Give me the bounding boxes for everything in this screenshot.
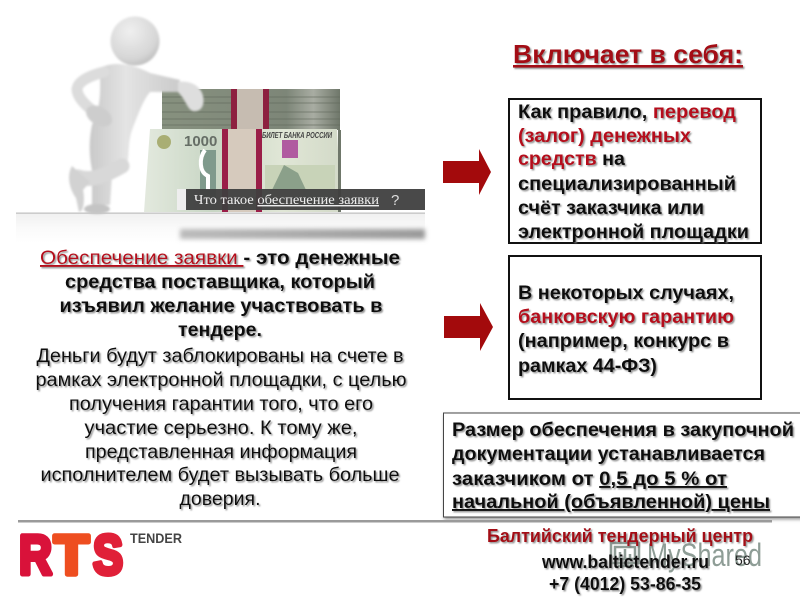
note text: начальной (объявленной) цены bbox=[452, 491, 770, 513]
money stack: БИЛЕТ БАНКА РОССИИ bbox=[262, 131, 332, 140]
footer contacts bbox=[487, 525, 753, 594]
arrow 2 bbox=[444, 303, 493, 351]
definition text block: изъявил желание участвовать в bbox=[60, 296, 382, 317]
panel text: (залог) денежных bbox=[518, 125, 691, 147]
panel text: (например, конкурс в bbox=[518, 330, 729, 352]
panel text bbox=[518, 101, 749, 243]
watermark: MyShared bbox=[611, 537, 762, 573]
definition text block: представленная информация bbox=[85, 442, 357, 463]
panel text: банковскую гарантию bbox=[518, 306, 734, 328]
definition heading: red underlined term: Обеспечение заявки - это денежные bbox=[40, 248, 400, 269]
panel: security size note bbox=[444, 413, 800, 517]
panel text: специализированный bbox=[518, 173, 736, 195]
heading: Включает в себя: Включает в себя: bbox=[513, 39, 743, 69]
panel text: рамках 44-ФЗ) bbox=[518, 355, 657, 377]
panel: money transfer bbox=[509, 99, 761, 243]
definition text block: тендере. bbox=[178, 320, 262, 341]
definition text block: доверия. bbox=[180, 489, 260, 510]
footer contacts: www.baltictender.ru bbox=[541, 551, 709, 572]
caption band bbox=[186, 189, 425, 210]
money stack: 1000 bbox=[184, 133, 217, 150]
definition text block: рамках электронной площадки, с целью bbox=[36, 370, 406, 391]
logo: RTS Tender bbox=[19, 523, 182, 586]
panel text: средств на bbox=[518, 148, 625, 170]
definition text block: участие серьезно. К тому же, bbox=[84, 418, 358, 439]
watermark: MyShared: MyShared bbox=[647, 537, 762, 573]
slide number: 56 bbox=[735, 552, 751, 568]
definition text block: исполнителем будет вызывать больше bbox=[40, 465, 400, 486]
panel text: электронной площадки bbox=[518, 221, 749, 243]
definition text block: средства поставщика, который bbox=[65, 272, 375, 293]
money stack bbox=[144, 89, 341, 212]
logo letters: R bbox=[19, 523, 52, 586]
logo letters bbox=[19, 523, 123, 586]
arrow 1 bbox=[443, 149, 491, 195]
panel text: счёт заказчика или bbox=[518, 197, 704, 219]
panel text: В некоторых случаях, bbox=[518, 282, 734, 304]
definition text block bbox=[36, 248, 406, 510]
caption band: Что такое обеспечение заявки bbox=[194, 193, 380, 208]
note text bbox=[452, 419, 794, 513]
3D human figure bbox=[69, 16, 204, 214]
watermark icon bbox=[611, 543, 639, 566]
note text: документации устанавливается bbox=[452, 443, 765, 465]
floor bbox=[16, 212, 425, 243]
logo letters: S bbox=[93, 523, 123, 586]
logo letters: T bbox=[54, 523, 89, 586]
footer contacts: Балтийский тендерный центр bbox=[487, 525, 753, 546]
note text: Размер обеспечения в закупочной bbox=[452, 419, 794, 441]
note text: заказчиком от 0,5 до 5 % от bbox=[452, 468, 727, 490]
definition text block: Деньги будут заблокированы на счете в bbox=[36, 346, 404, 367]
panel text: Как правило, перевод bbox=[518, 101, 737, 123]
panel: bank guarantee bbox=[509, 256, 761, 399]
caption band: ? bbox=[391, 192, 399, 209]
footer contacts: +7 (4012) 53-86-35 bbox=[549, 573, 701, 594]
photo: figure leaning on a pile of money bbox=[16, 0, 425, 243]
definition text block: получения гарантии того, что его bbox=[69, 394, 373, 415]
panel text bbox=[518, 282, 734, 377]
footer divider bbox=[18, 520, 772, 522]
logo: RTS Tender: TENDER bbox=[130, 530, 182, 546]
